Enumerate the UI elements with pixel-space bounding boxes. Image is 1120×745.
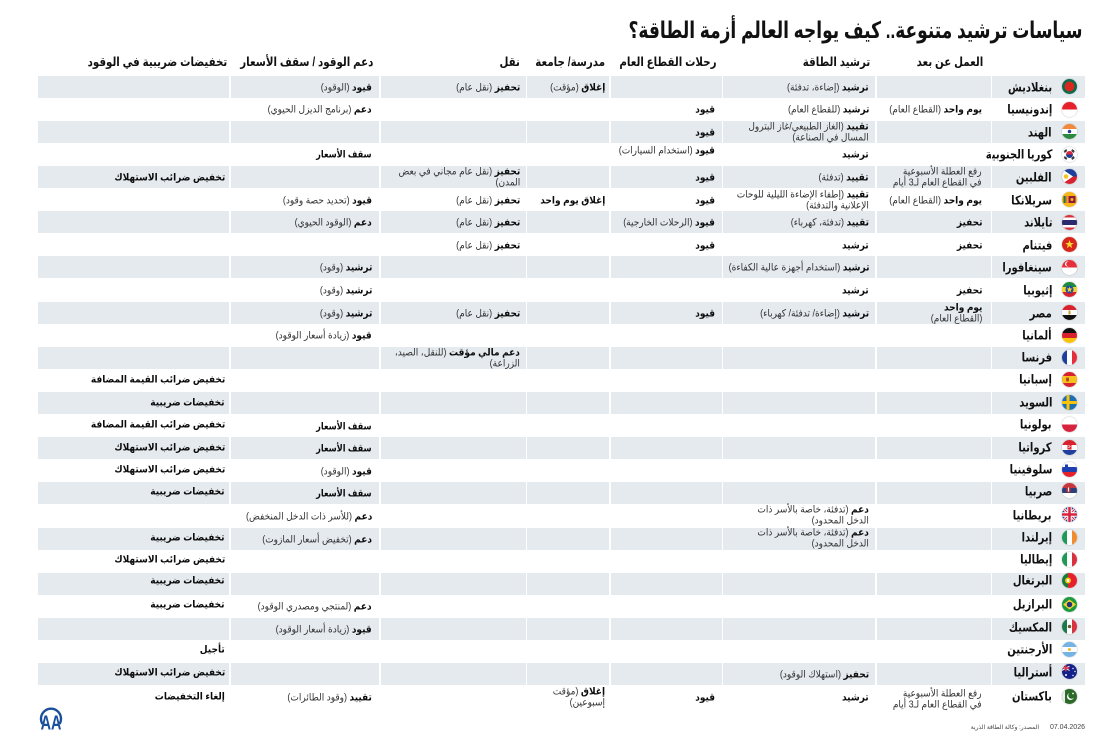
row: Sweden — [38, 392, 1085, 414]
transport cell: تحفيز (نقل عام) — [456, 217, 520, 228]
row: Mexico — [38, 618, 1085, 640]
energy cell — [758, 527, 869, 550]
country name: فيتنام — [1022, 238, 1052, 252]
remote work cell: في القطاع العام لـ3 أيام — [893, 700, 982, 711]
tax cell: تأجيل — [200, 644, 225, 655]
row: Poland — [38, 414, 1085, 436]
tax cell: تخفيض ضرائب القيمة المضافة — [91, 375, 225, 386]
icon: flag of Slovenia — [1062, 462, 1077, 477]
energy cell — [749, 121, 869, 144]
country name: بولونيا — [1020, 418, 1052, 432]
energy cell: ترشيد (إضاءة/ تدفئة/ كهرباء) — [760, 308, 869, 319]
tax cell: تخفيض ضرائب الاستهلاك — [114, 667, 225, 678]
fuel cell: دعم (لمنتجي ومصدري الوقود) — [258, 602, 372, 613]
icon: flag of Pakistan — [1062, 688, 1077, 704]
country name: إثيوبيا — [1023, 283, 1052, 297]
trips cell: قيود — [695, 127, 715, 138]
row: Thailand — [38, 211, 1085, 233]
remote work cell: في القطاع العام لـ3 أيام — [893, 178, 982, 189]
fuel cell: دعم (الوقود الحيوي) — [295, 217, 372, 228]
row: Argentina — [38, 640, 1085, 662]
fuel cell: سقف الأسعار — [317, 443, 372, 454]
country name: صربيا — [1025, 484, 1052, 498]
source note: المصدر: وكالة الطاقة الذرية — [971, 725, 1039, 731]
row: Egypt — [38, 302, 1085, 324]
country name: الفلبين — [1016, 170, 1052, 184]
energy cell: دعم (تدفئة، خاصة بالأسر ذات — [758, 527, 869, 538]
country name: ألمانيا — [1023, 328, 1052, 342]
school cell: إغلاق يوم واحد — [540, 195, 605, 206]
country name: كوريا الجنوبية — [985, 148, 1052, 162]
fuel cell: قيود (الوقود) — [321, 466, 372, 477]
icon: flag of Thailand — [1062, 215, 1077, 230]
tax cell: تخفيضات ضريبية — [151, 600, 225, 611]
energy cell: دعم (تدفئة، خاصة بالأسر ذات — [758, 504, 869, 515]
icon: flag of Philippines — [1062, 169, 1077, 184]
country name: المكسيك — [1009, 620, 1052, 634]
row: Pakistan — [38, 686, 1085, 708]
country name: كرواتيا — [1019, 440, 1052, 454]
tax cell: إلغاء التخفيضات — [155, 691, 225, 702]
transport cell: تحفيز (نقل عام) — [456, 240, 520, 251]
country name: السويد — [1019, 395, 1052, 409]
row: Spain — [38, 369, 1085, 391]
fuel cell: سقف الأسعار — [317, 421, 372, 432]
row: France — [38, 347, 1085, 369]
fuel cell: قيود (زيادة أسعار الوقود) — [276, 330, 372, 341]
transport cell: تحفيز (نقل عام مجاني في بعض — [398, 166, 520, 177]
row: Vietnam — [456, 236, 1078, 253]
trips cell: قيود — [695, 240, 715, 251]
school cell: إغلاق (مؤقت — [553, 686, 605, 697]
energy cell: تقييد (إطفاء الإضاءة الليلية للوحات — [737, 189, 869, 200]
row: Portugal — [38, 573, 1085, 595]
icon: flag of United Kingdom — [1062, 507, 1077, 522]
trips cell: قيود — [695, 195, 715, 206]
row: Bangladesh — [38, 76, 1085, 98]
icon: flag of Serbia — [1062, 483, 1077, 498]
tax cell: تخفيض ضرائب القيمة المضافة — [91, 420, 225, 431]
icon: flag of Croatia — [1062, 440, 1077, 454]
remote work cell: رفع العطلة الأسبوعية — [903, 166, 982, 177]
row: Brazil — [38, 595, 1085, 617]
remote work cell — [930, 302, 982, 325]
row: Singapore — [38, 256, 1085, 278]
energy cell: الدخل المحدود) — [812, 516, 869, 527]
country name: تايلاند — [1024, 215, 1052, 229]
school cell: إسبوعين) — [570, 698, 605, 709]
country name: إسبانيا — [1019, 373, 1052, 387]
row: India — [38, 121, 1085, 143]
row: Serbia — [38, 482, 1085, 504]
icon: flag of Spain — [1062, 372, 1077, 387]
icon: flag of France — [1062, 350, 1077, 364]
country name: الهند — [1028, 125, 1052, 139]
remote work cell: يوم واحد (القطاع العام) — [889, 195, 982, 206]
energy cell: تحفيز (استهلاك الوقود) — [780, 669, 869, 680]
country name: أستراليا — [1013, 665, 1052, 679]
country name: سريلانكا — [1011, 193, 1052, 207]
remote work cell: تحفيز — [956, 240, 982, 251]
icon: flag of Vietnam — [1062, 237, 1077, 252]
icon: flag of India — [1062, 124, 1077, 139]
icon: flag of Bangladesh — [1062, 79, 1077, 94]
row: Germany — [38, 324, 1085, 346]
energy cell: المسال في الصناعة) — [793, 133, 869, 144]
energy cell: ترشيد — [842, 240, 869, 251]
column heading: transport: نقل — [500, 55, 520, 69]
country name: الأرجنتين — [1007, 642, 1052, 656]
row: Ethiopia — [319, 281, 1078, 298]
trips cell: قيود — [695, 692, 715, 703]
row: Ireland — [38, 528, 1085, 550]
energy cell: ترشيد (استخدام أجهزة عالية الكفاءة) — [728, 263, 869, 274]
remote work cell: رفع العطلة الأسبوعية — [903, 688, 982, 699]
row: United Kingdom — [38, 505, 1085, 527]
tax cell: تخفيض ضرائب الاستهلاك — [114, 172, 225, 183]
fuel cell: ترشيد (وقود) — [319, 263, 372, 274]
title: سياسات ترشيد متنوعة.. كيف يواجه العالم أزمة الطاقة؟ — [629, 17, 1083, 43]
country name: فرنسا — [1022, 350, 1052, 364]
country name: البرازيل — [1013, 598, 1052, 612]
country name: باكستان — [1012, 689, 1052, 703]
icon: flag of Sri Lanka — [1062, 192, 1077, 207]
icon: flag of Germany — [1062, 328, 1077, 343]
icon: flag of Argentina — [1062, 642, 1077, 656]
icon: flag of Portugal — [1062, 573, 1077, 588]
column heading: energy rationing: ترشيد الطاقة — [803, 55, 870, 69]
transport cell: الزراعة) — [490, 359, 520, 370]
column heading: fuel tax cuts: تخفيضات ضريبية في الوقود — [87, 55, 227, 69]
row: Indonesia — [268, 101, 1078, 118]
icon: flag of Ethiopia — [1062, 282, 1077, 297]
fuel cell: سقف الأسعار — [317, 489, 372, 500]
energy cell: ترشيد — [842, 692, 869, 703]
energy cell: ترشيد — [842, 285, 869, 296]
icon: flag of Ireland — [1062, 530, 1077, 544]
tax cell: تخفيضات ضريبية — [151, 532, 225, 543]
remote work cell: يوم واحد (القطاع العام) — [889, 104, 982, 115]
fuel cell: دعم (برنامج الديزل الحيوي) — [268, 104, 372, 115]
icon: flag of South Korea — [1062, 147, 1077, 162]
school cell — [553, 686, 605, 709]
trips cell: قيود (استخدام السيارات) — [619, 146, 715, 157]
fuel cell: ترشيد (وقود) — [319, 308, 372, 319]
transport cell: المدن) — [495, 178, 520, 189]
tax cell: تخفيضات ضريبية — [151, 397, 225, 408]
fuel cell: قيود (زيادة أسعار الوقود) — [276, 624, 372, 635]
fuel cell: ترشيد (وقود) — [319, 285, 372, 296]
icon: flag of Sweden — [1062, 394, 1077, 410]
energy cell: تقييد (الغاز الطبيعي/غاز البترول — [749, 121, 869, 132]
energy cell: الإعلانية والتدفئة) — [806, 200, 869, 212]
energy cell — [737, 189, 869, 212]
fuel cell: تقييد (وقود الطائرات) — [287, 692, 372, 703]
transport cell: تحفيز (نقل عام) — [456, 308, 520, 319]
row: South Korea — [316, 146, 1078, 163]
tax cell: تخفيض ضرائب الاستهلاك — [114, 442, 225, 453]
country name: إيرلندا — [1022, 530, 1052, 544]
remote work cell: تحفيز — [956, 217, 982, 228]
remote work cell — [893, 688, 982, 711]
fuel cell: قيود (الوقود) — [321, 82, 372, 93]
energy cell — [758, 504, 869, 527]
tax cell: تخفيضات ضريبية — [151, 576, 225, 587]
date: 07.04.2026 — [1050, 724, 1085, 731]
trips cell: قيود — [695, 104, 715, 115]
icon: flag of Australia — [1062, 664, 1077, 679]
fuel cell: قيود (تحديد حصة وقود) — [283, 195, 372, 206]
country name: البرتغال — [1013, 574, 1052, 588]
icon: flag of Egypt — [1062, 305, 1077, 320]
column heading: remote work: العمل عن بعد — [916, 55, 983, 69]
energy cell: ترشيد — [842, 150, 869, 161]
icon: flag of Mexico — [1062, 619, 1077, 634]
icon: flag of Italy — [1062, 552, 1077, 566]
tax cell: تخفيضات ضريبية — [151, 486, 225, 497]
fuel cell: سقف الأسعار — [317, 150, 372, 161]
row: Italy — [38, 550, 1085, 572]
country name: سلوفينيا — [1009, 463, 1052, 477]
remote work cell: تحفيز — [956, 285, 982, 296]
remote work cell: يوم واحد — [944, 302, 982, 313]
remote work cell: (القطاع العام) — [930, 314, 982, 324]
icon: flag of Poland — [1062, 417, 1077, 432]
tax cell: تخفيض ضرائب الاستهلاك — [114, 554, 225, 565]
transport cell — [398, 166, 520, 189]
row: Croatia — [38, 437, 1085, 459]
country name: بريطانيا — [1013, 508, 1052, 522]
row: Sri Lanka — [283, 189, 1078, 212]
trips cell: قيود — [695, 308, 715, 319]
tax cell: تخفيض ضرائب الاستهلاك — [114, 465, 225, 476]
energy cell: ترشيد (للقطاع العام) — [788, 104, 869, 115]
country name: إيطاليا — [1020, 552, 1052, 566]
column heading: public sector trips: رحلات القطاع العام — [619, 55, 716, 69]
school cell: إغلاق (مؤقت) — [550, 82, 605, 93]
row: Philippines — [38, 166, 1085, 188]
transport cell — [395, 347, 520, 370]
transport cell: تحفيز (نقل عام) — [456, 82, 520, 93]
column heading: fuel subsidy / price cap: دعم الوقود / سقف الأسعار — [240, 55, 373, 69]
remote work cell — [893, 165, 982, 189]
trips cell: قيود (الرحلات الخارجية) — [623, 217, 715, 228]
transport cell: دعم مالي مؤقت (للنقل، الصيد، — [395, 347, 520, 358]
country name: بنغلاديش — [1008, 80, 1052, 94]
energy cell: الدخل المحدود) — [812, 538, 869, 550]
fuel cell: دعم (للأسر ذات الدخل المنخفض) — [246, 511, 372, 522]
icon: flag of Brazil — [1062, 597, 1077, 612]
country name: إندونيسيا — [1007, 102, 1052, 116]
transport cell: تحفيز (نقل عام) — [456, 195, 520, 206]
row: Slovenia — [38, 460, 1085, 482]
fuel cell: دعم (تخفيض أسعار المازوت) — [262, 534, 372, 545]
energy cell: ترشيد (إضاءة، تدفئة) — [787, 82, 869, 93]
icon: flag of Indonesia — [1062, 102, 1077, 117]
column heading: school / university: مدرسة/ جامعة — [535, 55, 605, 69]
energy cell: تقييد (تدفئة، كهرباء) — [791, 217, 869, 228]
country name: سينغافورا — [1003, 261, 1052, 275]
row: Australia — [38, 663, 1085, 685]
icon: flag of Singapore — [1062, 260, 1077, 275]
energy cell: تقييد (تدفئة) — [819, 172, 869, 183]
country name: مصر — [1030, 306, 1052, 320]
trips cell: قيود — [695, 172, 715, 183]
